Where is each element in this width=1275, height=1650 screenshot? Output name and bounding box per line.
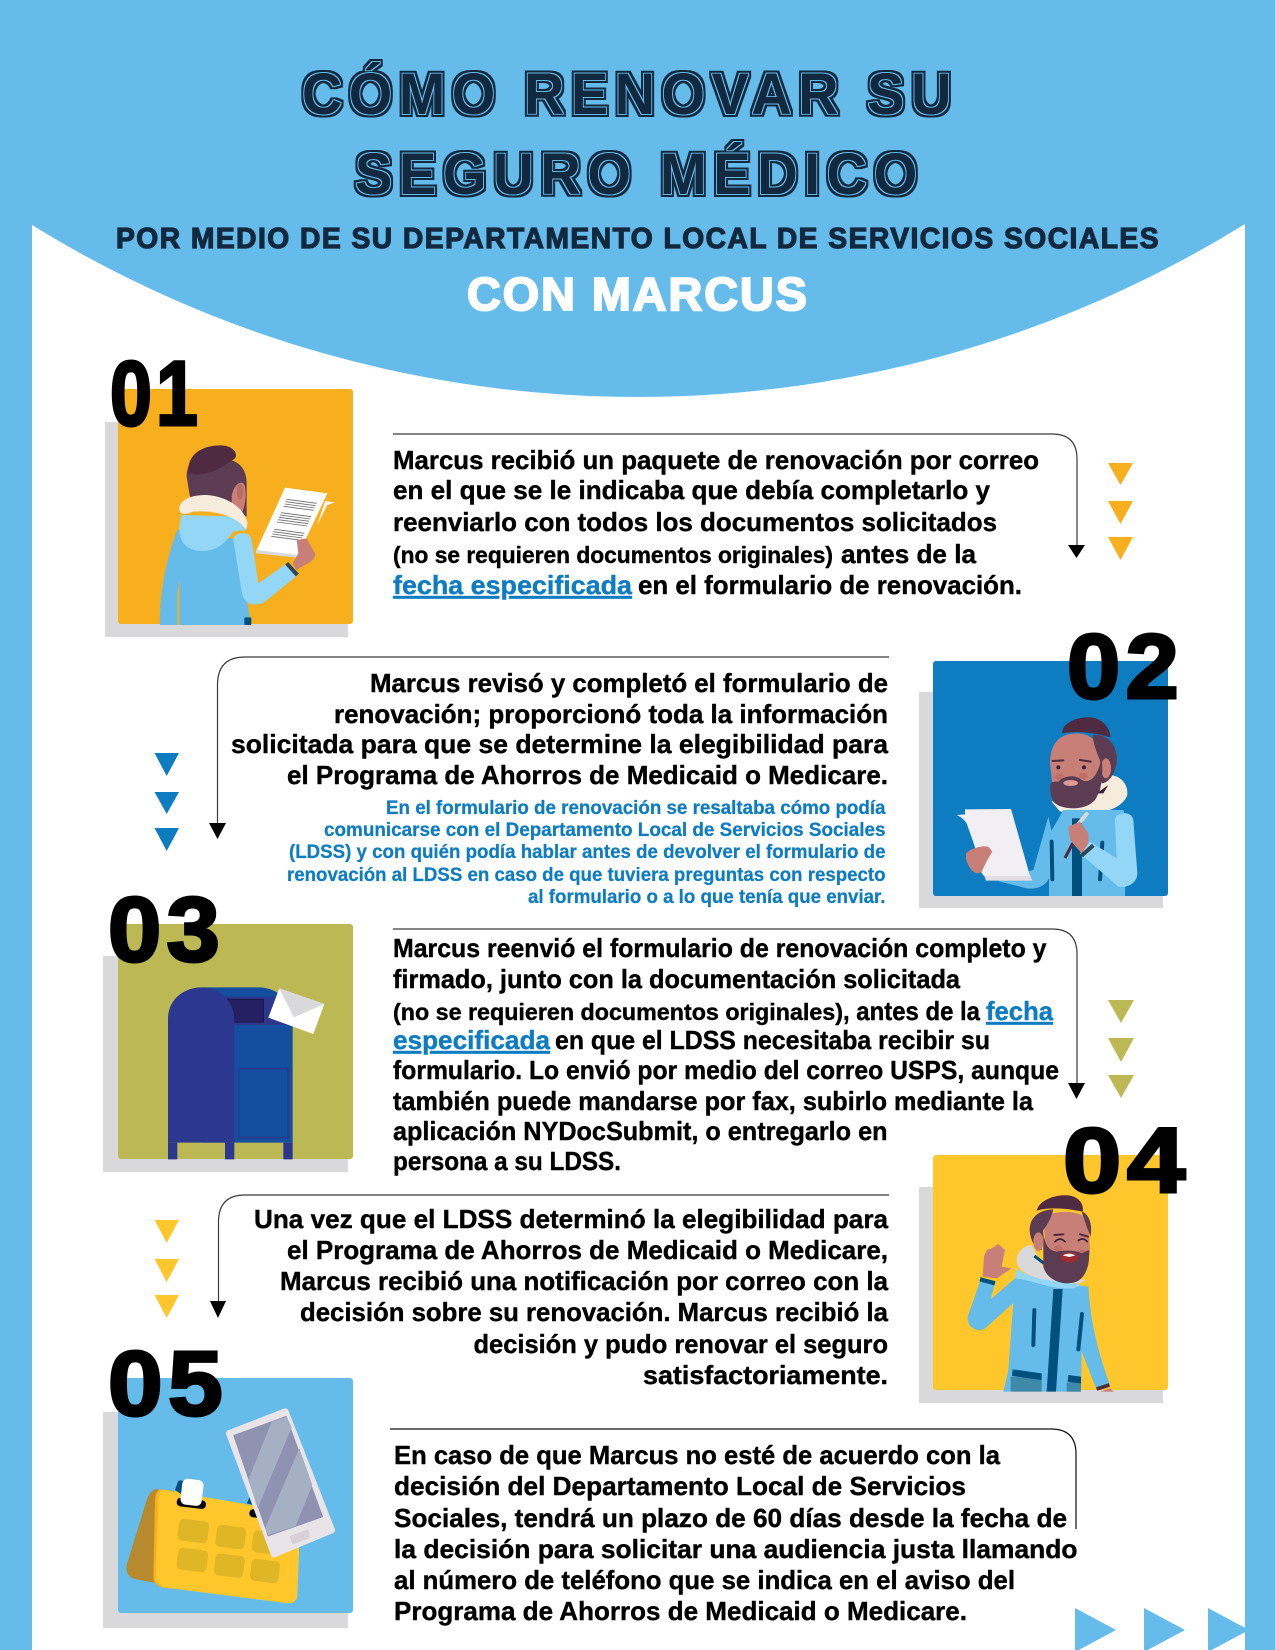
text block: step 03: firmado, junto con la documentación solicitada — [393, 964, 961, 994]
text block: step 05 — [394, 1440, 1078, 1626]
illustration: calendar and phone — [126, 1412, 332, 1603]
header: curved blue banner — [0, 0, 1275, 397]
number 01: 01 — [110, 343, 202, 445]
title: CÓMO RENOVAR SU — [302, 62, 958, 127]
text block: step 05: al número de teléfono que se indica en el aviso del — [394, 1565, 1015, 1595]
icon: blue triangles — [154, 753, 179, 851]
text block: step 04: decisión y pudo renovar el seguro — [474, 1329, 888, 1359]
text block: step 05: Sociales, tendrá un plazo de 60 días desde la fecha de — [394, 1503, 1067, 1533]
card shadow — [103, 1412, 348, 1628]
text block: step 05: En caso de que Marcus no esté de acuerdo con la — [394, 1440, 1001, 1470]
text block: step 01: en el formulario de renovación. — [638, 570, 1022, 600]
text block: step 04: el Programa de Ahorros de Medicaid o Medicare, — [287, 1235, 888, 1265]
text block: step 03: fecha — [986, 996, 1054, 1026]
illustration: Marcus filling form with pen — [957, 717, 1137, 896]
text block: step 04: Una vez que el LDSS determinó la elegibilidad para — [254, 1204, 889, 1234]
text block: step 01: en el que se le indicaba que debía completarlo y — [393, 475, 991, 505]
text block: step 03: persona a su LDSS. — [393, 1146, 621, 1176]
panel: step 02 — [919, 616, 1184, 908]
icon: yellow triangles — [154, 1220, 179, 1318]
number 05: 05 — [108, 1333, 228, 1435]
number 02: 02 — [1067, 616, 1184, 718]
card background — [118, 389, 353, 624]
text block: step 04: Marcus recibió una notificación por correo con la — [280, 1266, 889, 1296]
right border strip — [1245, 1560, 1275, 1650]
text block: step 01: Marcus recibió un paquete de renovación por correo — [393, 445, 1039, 475]
subtitle: con Marcus: CON MARCUS — [467, 268, 809, 320]
text block: step 01: reenviarlo con todos los documentos solicitados — [393, 507, 997, 537]
text block: step 03 — [393, 933, 1059, 1176]
text block: step 01: fecha especificada — [393, 570, 633, 600]
arrow: step 03 connector — [393, 929, 1085, 1099]
text block: step 02 blue note: (LDSS) y con quién podía hablar antes de devolver el formulario de — [289, 842, 886, 863]
text block: step 03: (no se requieren documentos originales) — [393, 999, 843, 1025]
text block: step 05: Programa de Ahorros de Medicaid o Medicare. — [394, 1596, 967, 1626]
text block: step 01: antes de la — [841, 539, 977, 569]
text block: step 02 blue note: al formulario o a lo que tenía que enviar. — [528, 887, 886, 908]
number 04: 04 — [1063, 1110, 1191, 1212]
text block: step 01: (no se requieren documentos originales) — [393, 542, 833, 568]
icon: orange triangles — [1108, 463, 1133, 560]
text block: step 03: formulario. Lo envió por medio del correo USPS, aunque — [393, 1055, 1059, 1085]
text block: step 02 blue note: renovación al LDSS en caso de que tuviera preguntas con respecto — [287, 865, 886, 886]
panel: step 04 — [919, 1110, 1191, 1403]
arrow: step 02 connector — [209, 657, 889, 839]
text block: step 02: solicitada para que se determine la elegibilidad para — [231, 729, 889, 759]
icon: olive triangles — [1108, 1000, 1134, 1098]
title: SEGURO MÉDICO — [355, 142, 924, 207]
text block: step 02: el Programa de Ahorros de Medicaid o Medicare. — [287, 760, 888, 790]
text block: step 02 blue note — [287, 798, 886, 908]
text block: step 02: renovación; proporcionó toda la información — [334, 699, 888, 729]
text block: step 02 — [231, 668, 889, 790]
text block: step 03: Marcus reenvió el formulario de renovación completo y — [393, 933, 1047, 963]
arrow: step 01 connector — [393, 434, 1085, 558]
card background — [118, 1378, 353, 1613]
text block: step 03: también puede mandarse por fax, subirlo mediante la — [393, 1086, 1034, 1116]
arrow: step 04 connector — [210, 1195, 889, 1318]
text block: step 01 — [393, 445, 1039, 600]
panel: step 05 — [103, 1333, 353, 1628]
text block: step 05: decisión del Departamento Local de Servicios — [394, 1471, 966, 1501]
card shadow — [919, 1187, 1163, 1403]
card background — [933, 661, 1168, 896]
text block: step 03: especificada — [393, 1025, 551, 1055]
text block: step 04: decisión sobre su renovación. Marcus recibió la — [300, 1297, 889, 1327]
text block: step 04: satisfactoriamente. — [643, 1360, 888, 1390]
title — [302, 62, 958, 207]
text block: step 03: aplicación NYDocSubmit, o entregarlo en — [393, 1116, 888, 1146]
icon: blue forward arrows — [1075, 1608, 1249, 1650]
text block: step 03: , antes de la — [843, 996, 980, 1026]
panel: step 03 — [103, 879, 353, 1172]
text block: step 02 blue note: comunicarse con el Departamento Local de Servicios Sociales — [324, 820, 886, 841]
illustration: Marcus reading paper from behind — [160, 445, 335, 625]
subtitle: POR MEDIO DE SU DEPARTAMENTO LOCAL DE SERVICIOS SOCIALES — [116, 223, 1160, 255]
card background — [933, 1155, 1168, 1390]
illustration: blue mailbox and envelope — [168, 987, 324, 1159]
card shadow — [103, 956, 348, 1172]
text block: step 02 blue note: En el formulario de renovación se resaltaba cómo podía — [386, 798, 886, 819]
text block: step 04 — [254, 1204, 889, 1390]
panel: step 01 — [105, 343, 353, 637]
bracket: step 05 rule — [390, 1429, 1076, 1529]
illustration: Marcus waving — [968, 1195, 1114, 1392]
card shadow — [105, 422, 348, 637]
card shadow — [919, 692, 1163, 908]
text block: step 05: la decisión para solicitar una audiencia justa llamando — [394, 1534, 1078, 1564]
text block: step 03: en que el LDSS necesitaba recibir su — [555, 1025, 990, 1055]
card background — [118, 924, 353, 1159]
text block: step 02: Marcus revisó y completó el formulario de — [370, 668, 888, 698]
number 03: 03 — [108, 879, 225, 981]
